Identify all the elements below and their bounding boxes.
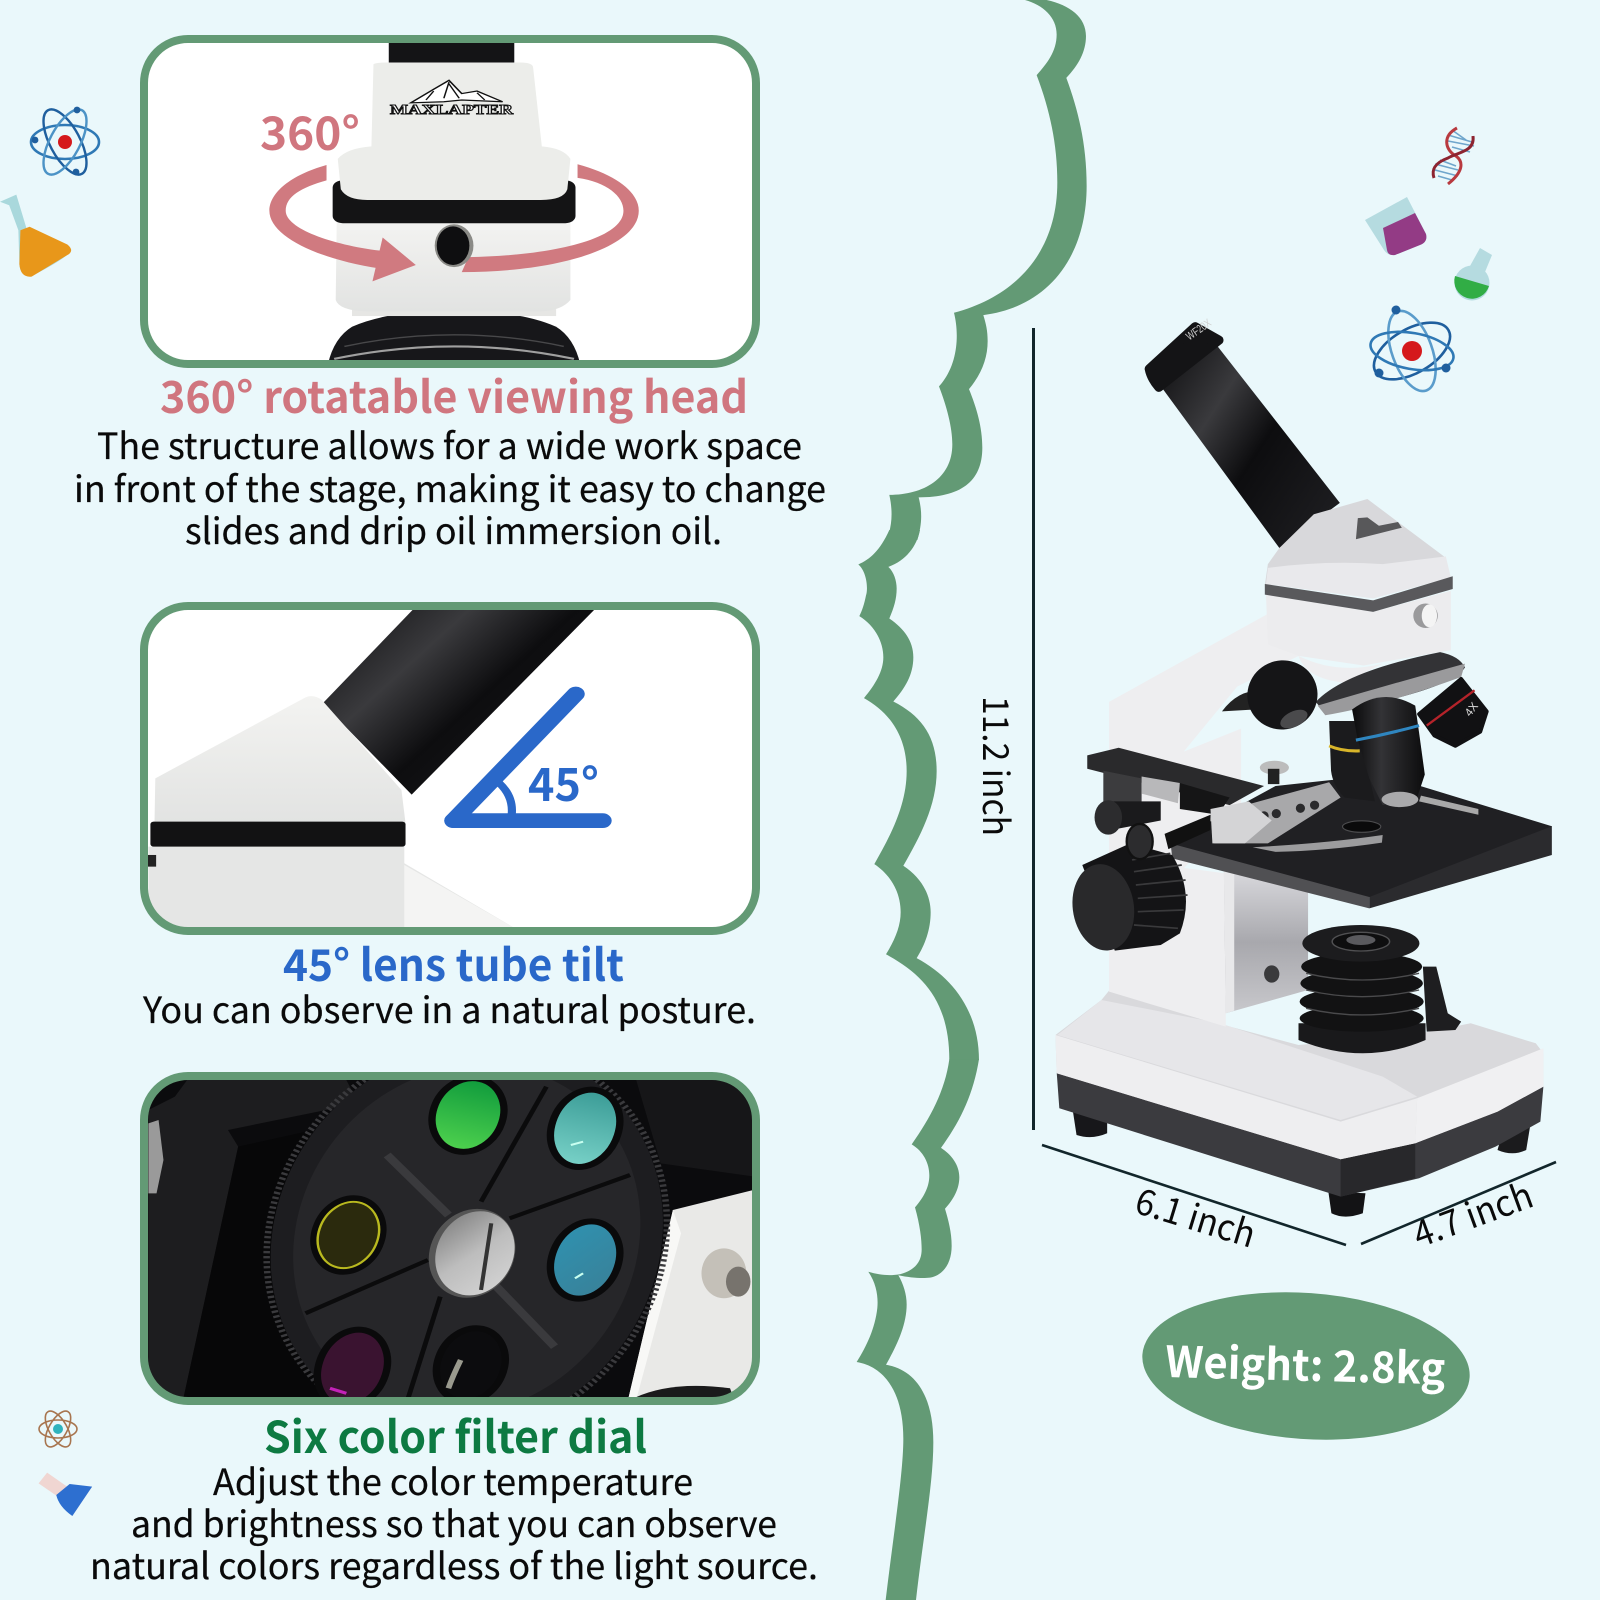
white base — [1055, 991, 1543, 1159]
height label: 11.2 inch — [972, 696, 1024, 836]
objective 4X — [1419, 679, 1487, 746]
weight label: Weight: 2.8kg — [1165, 1328, 1446, 1397]
upper microscope: tube, head, objectives: 4X — [1463, 700, 1481, 719]
filters — [304, 1072, 630, 1413]
rotation arrow — [269, 164, 639, 281]
angle symbol — [453, 694, 603, 821]
icon: small atom bottom left — [39, 1407, 77, 1451]
eyepiece tube — [1161, 342, 1340, 548]
panel: 45 degree tilt — [140, 602, 760, 935]
center screw — [428, 1208, 516, 1298]
dark base band — [1057, 1072, 1543, 1197]
text block: head description: slides and drip oil immersion oil. — [185, 503, 722, 555]
icon: blue flask — [39, 1473, 92, 1516]
upper microscope: tube, head, objectives — [1087, 317, 1552, 897]
text block: filter description: and brightness so that you can observe — [131, 1496, 777, 1548]
feet — [1073, 1110, 1107, 1137]
text block: filter description — [90, 1454, 818, 1590]
icon: atom right — [1365, 305, 1459, 397]
heading: 360 rotatable viewing head: 360° rotatable viewing head — [160, 362, 748, 426]
microscope — [1055, 317, 1552, 1217]
icon: green flask — [1454, 248, 1492, 300]
heading: six color filter dial: Six color filter dial — [264, 1402, 647, 1466]
microscope dimension lines — [1034, 328, 1556, 1245]
text block: tilt description: You can observe in a natural posture. — [142, 982, 756, 1034]
nosepiece — [1299, 656, 1383, 683]
text block: filter description: natural colors regardless of the light source. — [90, 1538, 818, 1590]
label 45 degrees: 45° — [528, 749, 599, 815]
housing frame — [148, 1080, 359, 1400]
text block: head description: in front of the stage, making it easy to change — [74, 461, 826, 513]
label 360 degrees: 360° — [260, 98, 360, 164]
objective front blue — [1352, 697, 1425, 805]
white block — [628, 1190, 753, 1400]
icon: dna — [1433, 128, 1474, 184]
spokes — [306, 1087, 630, 1400]
black ring under head — [329, 316, 580, 360]
heading: 45 lens tube tilt: 45° lens tube tilt — [283, 930, 624, 994]
depth label: 4.7 inch — [1405, 1167, 1539, 1258]
dial wheel — [263, 1080, 670, 1397]
pillar — [1109, 858, 1226, 1027]
icon: atom top left — [31, 103, 99, 181]
objective left — [1236, 649, 1329, 741]
panel: 360 rotatable head — [140, 35, 760, 371]
microscope arm — [1109, 614, 1306, 900]
objective back yellow — [1329, 721, 1375, 801]
coarse focus knob — [1082, 843, 1186, 951]
mechanical stage — [1210, 782, 1341, 843]
width label: 6.1 inch — [1130, 1173, 1263, 1258]
icon: purple beaker — [1365, 197, 1426, 255]
head top — [1265, 499, 1451, 585]
stage top — [1170, 775, 1552, 897]
stage side faces — [1170, 840, 1369, 908]
text block: head description: The structure allows for a wide work space — [97, 418, 802, 470]
eyepiece marking: WF20X — [1184, 317, 1214, 343]
text block: filter description: Adjust the color temperature — [213, 1454, 693, 1506]
icon: orange flask — [0, 195, 71, 277]
panel: six color filter dial — [140, 1072, 760, 1405]
condenser — [1423, 967, 1461, 1032]
brand mountain — [411, 80, 503, 103]
head lower — [1266, 591, 1451, 665]
text block: head description — [74, 418, 826, 555]
weight badge — [1137, 1282, 1475, 1450]
lower microscope: base, pillar, stage, condenser — [1055, 826, 1552, 1217]
scalloped green divider — [857, 0, 1087, 1600]
brand wordmark: MAXLAPTER — [390, 103, 514, 118]
